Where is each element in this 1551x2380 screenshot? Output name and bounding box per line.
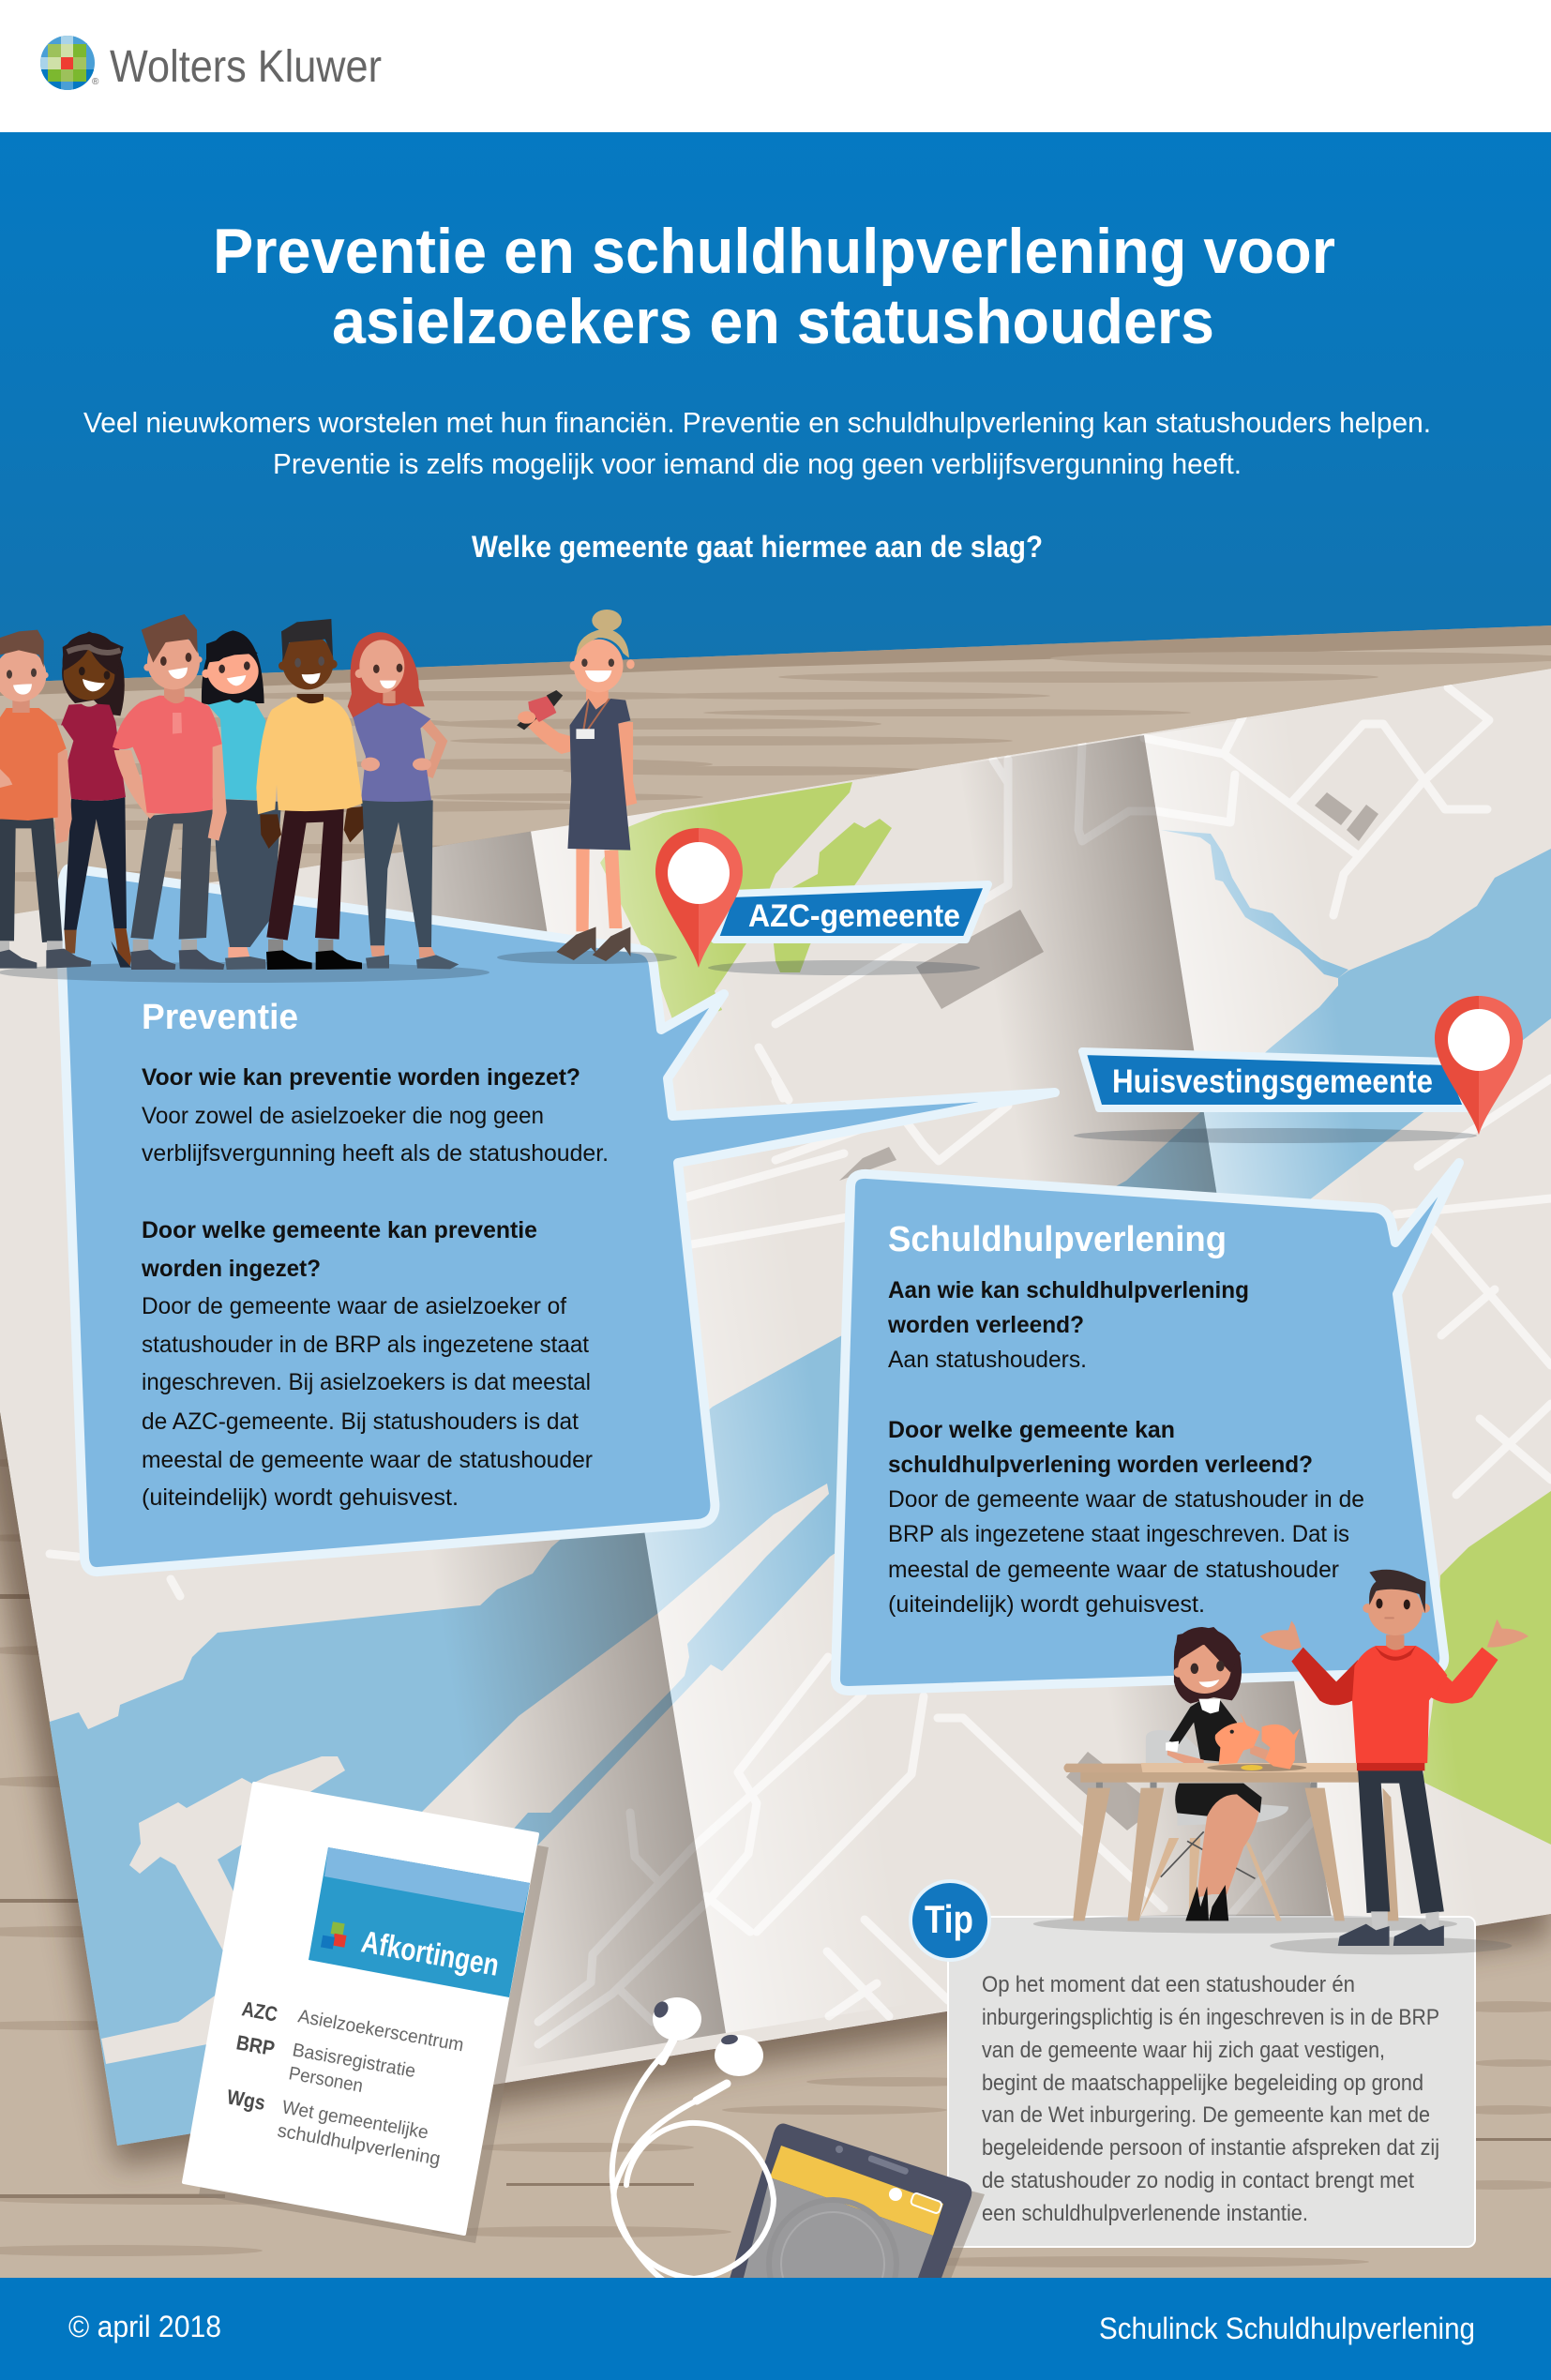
text: Preventie body: (uiteindelijk) wordt gehuisvest. [142,1484,459,1511]
text: Preventie body: Voor wie kan preventie worden ingezet? [142,1064,580,1091]
icon: broken piggy bank [1207,1713,1306,1771]
text: Schuldhulpverlening body: Door welke gemeente kan [888,1417,1175,1443]
header bar [0,0,1551,132]
text: Schuldhulpverlening body [887,1277,1364,1618]
title [213,216,1335,357]
text: tip: van de Wet inburgering. De gemeente kan met de [982,2102,1430,2128]
label: Huisvestingsgemeente: Huisvestingsgemeente [1112,1063,1433,1100]
title: Preventie en schuldhulpverlening voor [213,216,1335,287]
panel: tip box [948,1917,1475,2247]
text: Schuldhulpverlening body: Aan statushouders. [888,1347,1087,1373]
pin: Huisvestingsgemeente [1435,996,1523,1135]
map buildings [839,792,1378,1830]
illustration: group of six people [0,614,459,970]
text: Preventie body: de AZC-gemeente. Bij statushouders is dat [142,1408,579,1435]
panel: Preventie callout [60,868,1055,1572]
text: tip: begeleidende persoon of instantie afspreken dat zij [982,2135,1439,2161]
map green areas [600,782,1551,1845]
badge: Tip [909,1879,991,1962]
map roads [50,687,1551,2044]
panel: Schuldhulpverlening callout [836,1163,1459,1691]
abbreviations list: AZC [240,1996,279,2026]
text: Schuldhulpverlening body: meestal de gemeente waar de statushouder [888,1557,1339,1583]
footer [0,2278,1551,2380]
map land: peninsula and strips [101,1484,829,2064]
intro text: Preventie is zelfs mogelijk voor iemand die nog geen verblijfsvergunning heeft. [273,447,1242,480]
text: tip: een schuldhulpverlenende instantie. [982,2201,1308,2226]
heading: Afkortingen: Afkortingen [359,1923,502,1982]
text: tip: Op het moment dat een statushouder én [982,1972,1355,1997]
footer: brand: Schulinck Schuldhulpverlening [1099,2312,1475,2345]
person: pink shirt [113,614,227,970]
text: tip [982,1972,1439,2226]
text: Preventie body: verblijfsvergunning heeft als de statushouder. [142,1140,609,1167]
shadows under figures and labels [0,951,1477,1143]
text: Schuldhulpverlening body: Aan wie kan schuldhulpverlening [888,1277,1249,1303]
map water [28,830,1551,2157]
title: asielzoekers en statushouders [332,286,1214,357]
abbreviations list: Personen [287,2063,365,2097]
map fold shading [318,713,1491,2068]
icon: small logo [321,1921,349,1951]
heading: Preventie: Preventie [142,998,298,1037]
text: tip: inburgeringsplichtig is én ingeschreven is in de BRP [982,2005,1439,2030]
text: Preventie body: Door welke gemeente kan preventie [142,1217,537,1243]
intro text [83,406,1431,480]
badge: Tip: Tip [925,1897,973,1941]
illustration: interviewer with microphone [517,610,637,961]
logo: Wolters Kluwer: ® [92,77,99,87]
footer: date: © april 2018 [68,2310,221,2343]
person: purple shirt [348,632,459,969]
text: Preventie body: statushouder in de BRP als ingezetene staat [142,1332,589,1358]
person: yellow sweater [256,619,364,970]
wood table background [0,625,1551,2279]
abbreviations list: Asielzoekerscentrum [296,2006,465,2056]
folded map [0,669,1551,2157]
abbreviations list [225,1996,465,2170]
label: Huisvestingsgemeente [1082,1051,1468,1108]
person: orange shirt [0,630,91,969]
text: Preventie body: ingeschreven. Bij asielzoekers is dat meestal [142,1369,591,1395]
text: Schuldhulpverlening body: Door de gemeente waar de statushouder in de [888,1486,1364,1513]
pin: AZC-gemeente [655,828,743,968]
text: Preventie body: worden ingezet? [141,1256,321,1282]
question: Welke gemeente gaat hiermee aan de slag? [472,530,1043,564]
text: Preventie body: meestal de gemeente waar de statushouder [142,1447,593,1473]
illustration: smartphone [730,2123,985,2278]
abbreviations list: schuldhulpverlening [276,2120,442,2170]
intro text: Veel nieuwkomers worstelen met hun financiën. Preventie en schuldhulpverlening kan statushouders helpen. [83,406,1431,439]
text: tip: van de gemeente waar hij zich gaat vestigen, [982,2038,1385,2063]
illustration: table with woman and piggy bank [1033,1627,1457,1934]
panel: Afkortingen card [184,1784,549,2243]
label: AZC-gemeente [715,884,988,940]
heading: Schuldhulpverlening: Schuldhulpverlening [888,1220,1227,1259]
text: Schuldhulpverlening body: BRP als ingezetene staat ingeschreven. Dat is [888,1521,1349,1547]
label: AZC-gemeente: AZC-gemeente [748,898,960,934]
text: Preventie body: Voor zowel de asielzoeker die nog geen [142,1103,544,1129]
text: tip: de statushouder zo nodig in contact brengt met [982,2168,1414,2193]
text: Schuldhulpverlening body: worden verleend? [887,1312,1084,1338]
abbreviations list: Wet gemeentelijke [280,2097,430,2144]
illustration: shrugging man in red sweater [1260,1570,1528,1954]
person: maroon shirt [61,631,131,968]
text: Schuldhulpverlening body: schuldhulpverlening worden verleend? [888,1452,1313,1478]
logo: Wolters Kluwer [40,36,381,90]
map drop shadow [0,750,1551,2166]
person: cyan shirt [202,630,281,970]
text: Schuldhulpverlening body: (uiteindelijk) wordt gehuisvest. [888,1591,1205,1618]
illustration: earphones [612,1997,774,2288]
logo: Wolters Kluwer: Wolters Kluwer [110,42,382,92]
text: Preventie body: Door de gemeente waar de asielzoeker of [142,1293,566,1319]
text: Preventie body [141,1064,609,1511]
abbreviations list: Basisregistratie [291,2040,417,2082]
text: tip: begint de maatschappelijke begeleiding op grond [982,2071,1423,2096]
abbreviations list: BRP [234,2030,277,2060]
abbreviations list: Wgs [225,2085,267,2115]
blue header background [0,132,1551,714]
